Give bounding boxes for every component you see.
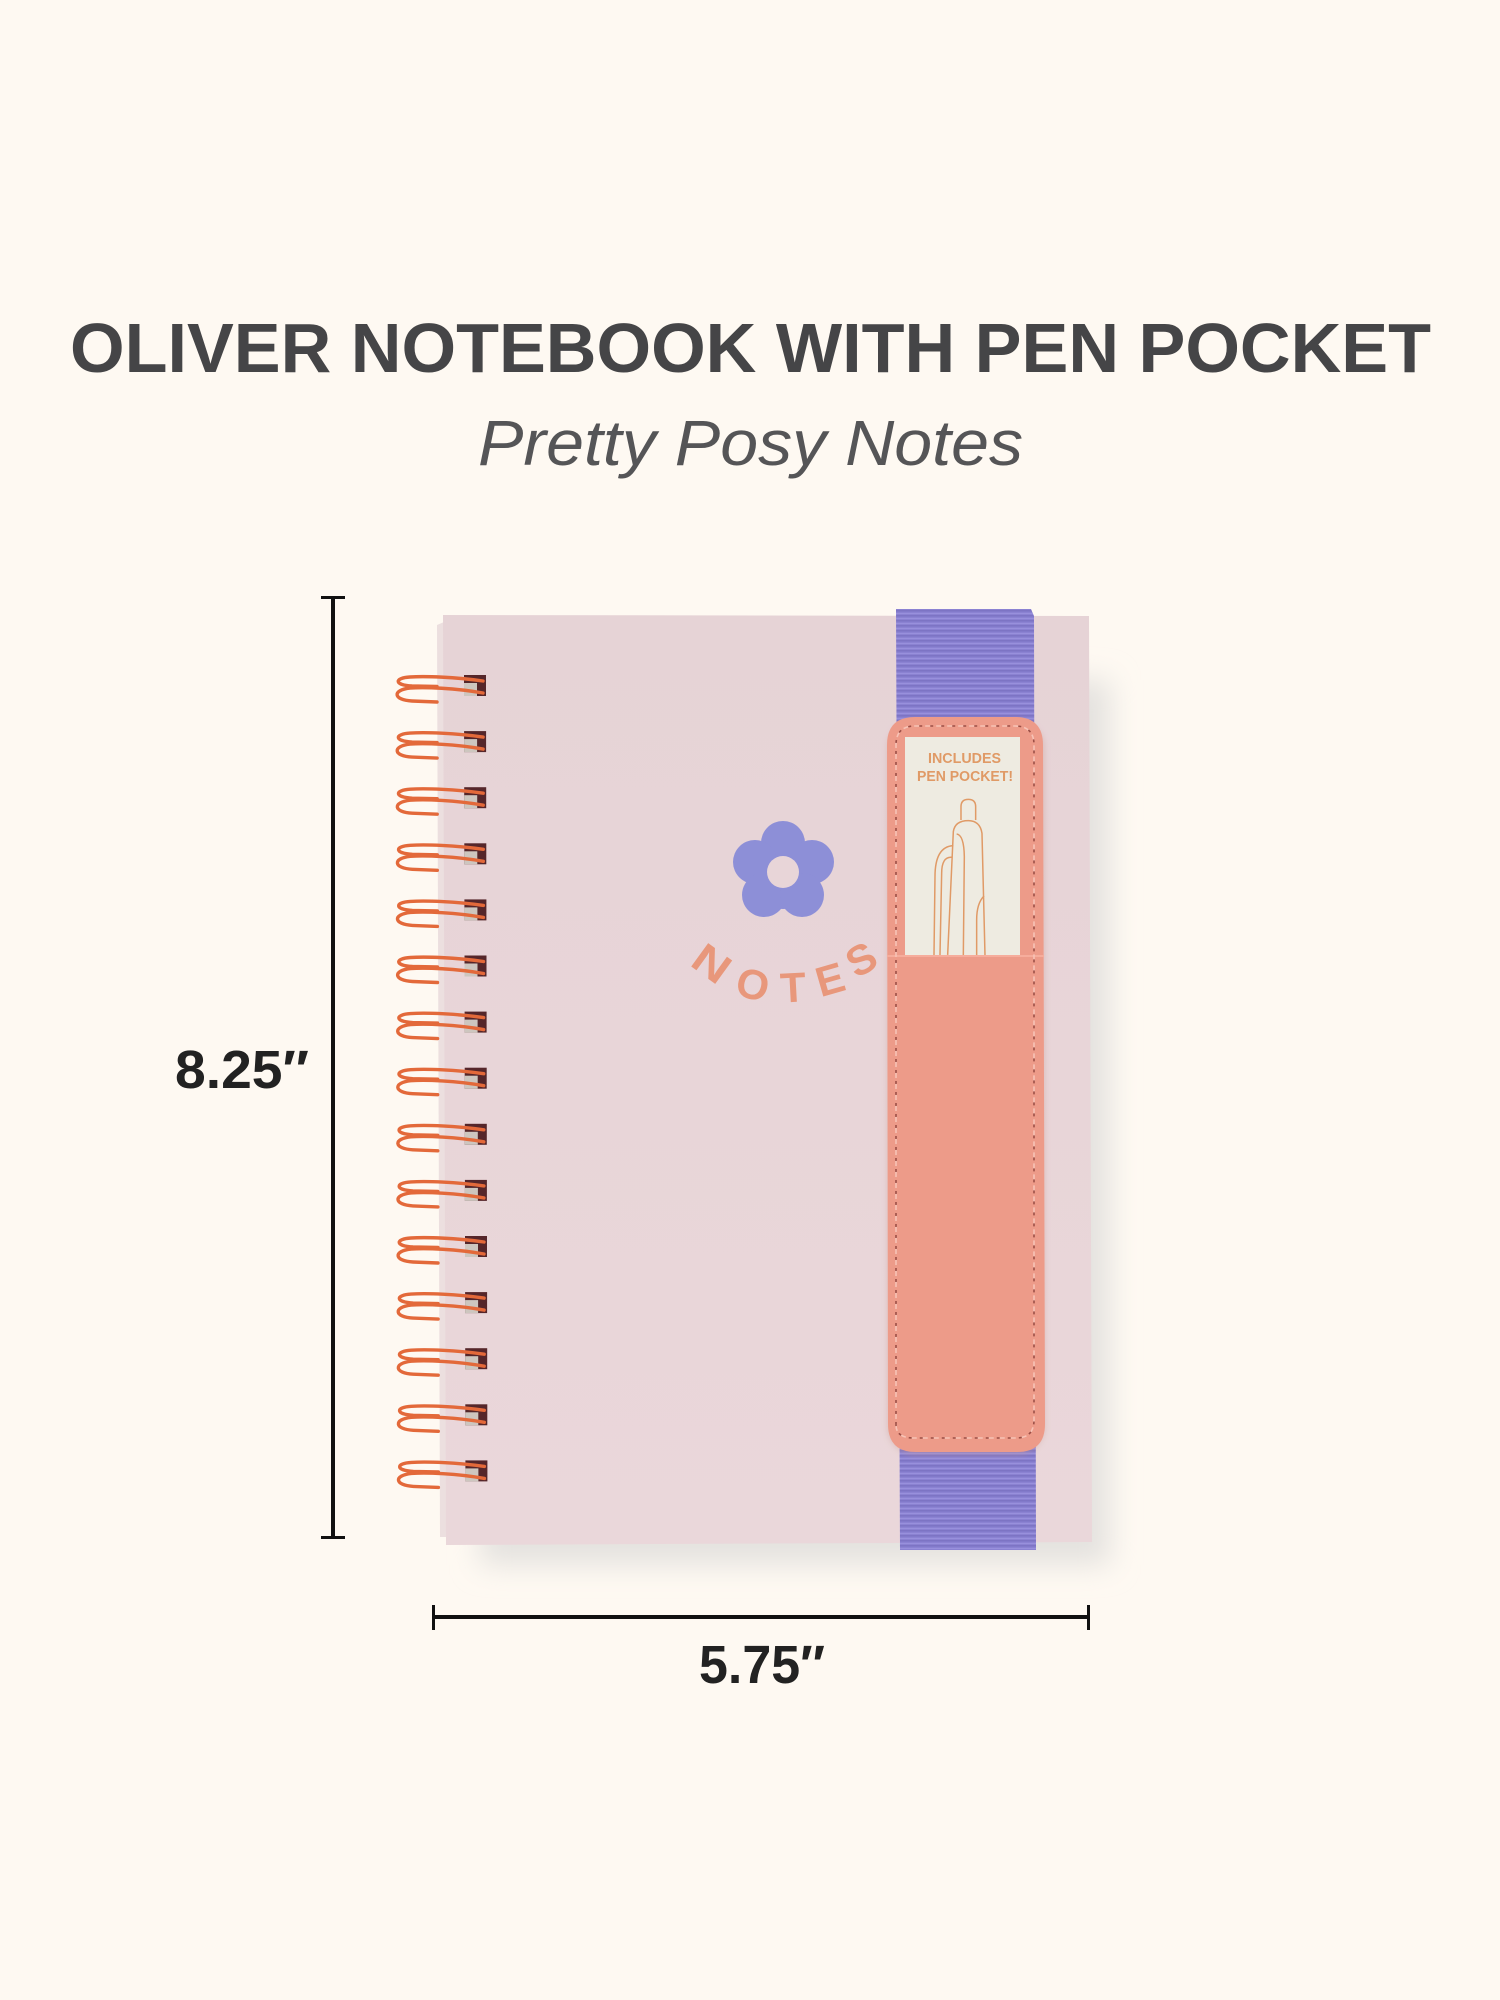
elastic band <box>896 609 1036 1550</box>
notes arc lettering: E <box>810 953 850 1006</box>
pocket seam <box>887 955 1044 957</box>
subtitle: Pretty Posy Notes <box>478 407 1023 479</box>
title: OLIVER NOTEBOOK WITH PEN POCKET <box>70 309 1431 387</box>
notes arc lettering: N <box>683 934 740 993</box>
notebook <box>397 609 1110 1565</box>
notes arc lettering <box>683 932 885 1012</box>
pocket shadow <box>887 720 1045 1455</box>
pocket stitching <box>896 726 1034 1438</box>
notes arc lettering: T <box>779 963 807 1012</box>
notes arc lettering: S <box>837 932 885 987</box>
icon: pen outlines <box>934 799 985 955</box>
card text <box>917 751 1013 785</box>
notebook shadow <box>480 680 1110 1565</box>
pocket card <box>905 737 1020 956</box>
pocket leather <box>887 717 1045 1452</box>
height dimension line <box>321 596 345 1539</box>
spiral binding <box>397 675 487 1487</box>
width label: 5.75″ <box>699 1635 825 1695</box>
icon: flower <box>733 821 834 917</box>
back pages <box>437 622 448 1537</box>
width dimension line <box>432 1605 1090 1630</box>
notes arc lettering: O <box>731 958 774 1011</box>
card text: INCLUDES <box>928 751 1001 767</box>
pen pocket <box>887 717 1045 1455</box>
front cover <box>443 615 1092 1545</box>
height label: 8.25″ <box>175 1040 309 1100</box>
card text: PEN POCKET! <box>917 769 1013 785</box>
